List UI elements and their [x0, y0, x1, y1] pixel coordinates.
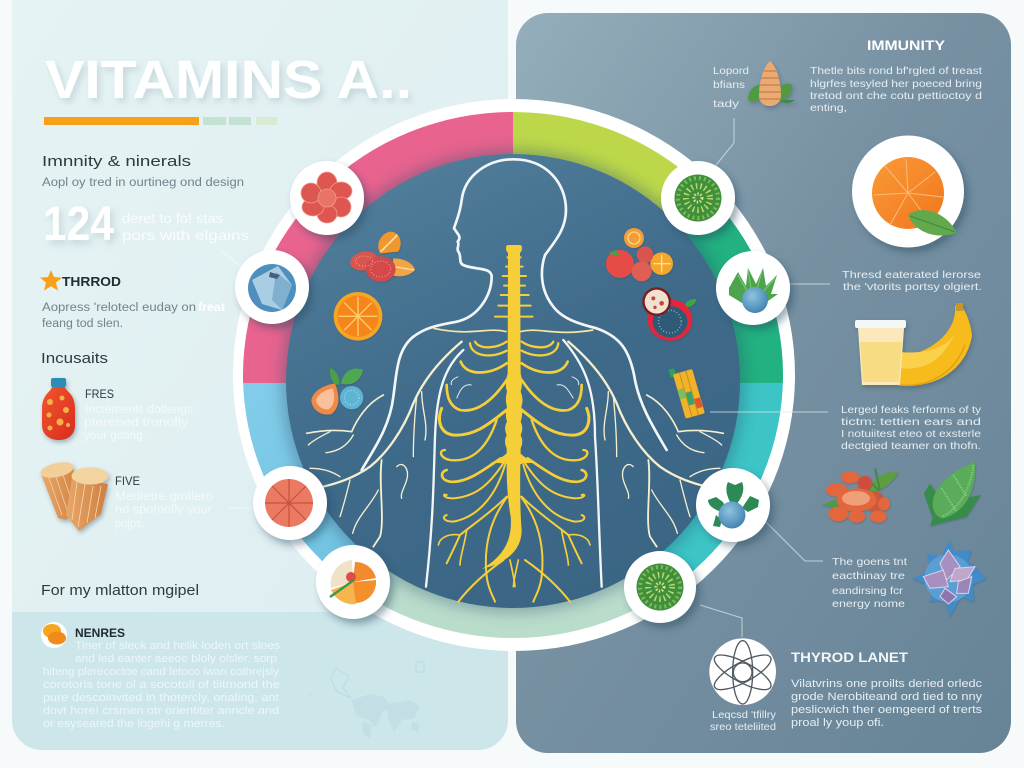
- heading: for my mlatton: For my mlatton mgipel: [41, 583, 199, 599]
- immunity paragraph: [810, 65, 982, 114]
- immunity paragraph: Thetle bits rond bf'rgled of treast: [810, 65, 982, 77]
- goens text: [832, 556, 907, 610]
- five description: pojps.: [115, 518, 145, 530]
- statistic 124: 124: [43, 198, 114, 251]
- heading: immunity: IMMUNITY: [867, 38, 945, 53]
- thyroid block with star: THRROD: [62, 274, 121, 289]
- five description: [115, 491, 213, 530]
- thyroid block with star: [40, 270, 225, 330]
- thresd text: Thresd eaterated lerorse: [842, 269, 981, 281]
- immunity paragraph: hlgrfes tesyled her poeced bring: [810, 78, 982, 90]
- statistic caption: deret to fo! stas: [122, 211, 223, 226]
- icon: green ball: [636, 564, 684, 610]
- node: green fan blue ball: [716, 251, 790, 325]
- panel: bottom left band: [12, 612, 508, 750]
- human body diagram: [307, 159, 723, 602]
- item: fries text: FRES: [85, 387, 114, 401]
- goens text: eandirsing fcr: [832, 585, 904, 597]
- atom caption: Leqcsd 'tfillry: [712, 710, 776, 721]
- icon: atom plate: [709, 638, 776, 705]
- lerged text: I notuiitest eteo ot exsterle: [841, 428, 981, 440]
- panel: left information panel: [12, 0, 508, 750]
- thresd text: the 'vtorits portsy olgiert.: [843, 281, 982, 293]
- lerged text: Lerged feaks ferforms of ty: [841, 404, 982, 416]
- node: red flower: [290, 161, 364, 235]
- icon: orange badge: [41, 622, 67, 648]
- ring segments: [243, 112, 783, 638]
- thyroid lanet paragraph: proal ly youp ofi.: [791, 717, 884, 729]
- peripheral nerves: [307, 342, 723, 547]
- item: five text: FIVE: [115, 474, 140, 488]
- nerves paragraph: or esyseared the logehi g merres.: [43, 718, 225, 730]
- icon: mixed food fan: [330, 560, 376, 604]
- immunity paragraph: tretod ont che cotu pettioctoy d: [810, 90, 982, 102]
- item: fries text: [84, 387, 193, 442]
- thyroid lanet block: [791, 649, 983, 729]
- icon: red bottle: [42, 378, 75, 440]
- label: small left note: Lopord: [713, 65, 749, 77]
- thyroid lanet paragraph: peslicwich ther oemgeerd of trerts: [791, 704, 983, 716]
- nerves paragraph: Tiner of sleck and helik loden ort sloes: [75, 640, 281, 652]
- connector lines: [221, 118, 830, 637]
- node: blue cube: [235, 250, 309, 324]
- food: orange slice: [334, 292, 382, 341]
- node: green fuzzy ball top: [661, 161, 735, 235]
- node: red slice: [253, 466, 327, 540]
- icon: big orange on plate: [852, 136, 964, 248]
- label: small left note: bfians: [713, 79, 745, 91]
- small lung strokes: [451, 377, 579, 398]
- thyroid description: freat: [198, 302, 225, 314]
- label: small left note: tady: [713, 98, 740, 110]
- thyroid lanet paragraph: Vilatvrins one proilts deried orledc: [791, 678, 983, 690]
- statistic caption: [122, 211, 249, 243]
- food: dragon fruit: [642, 287, 697, 341]
- body outline: [362, 159, 667, 587]
- lerged text: [841, 404, 982, 452]
- food: grapefruit and blue fruit: [311, 368, 363, 415]
- leaf: [908, 210, 957, 236]
- nerves paragraph: corotoris tone ol a socotoli of tiitmond the: [43, 679, 280, 691]
- food: tomatoes and citrus: [606, 228, 673, 281]
- fries description: [84, 404, 193, 442]
- icon: red beans: [822, 468, 898, 523]
- foods lower right: [709, 462, 986, 705]
- icon: pine cone: [748, 61, 795, 106]
- atom caption: sreo teteliited: [710, 722, 776, 733]
- thyroid description: [42, 302, 225, 330]
- nerves paragraph: and led eanter aeeoe bloly olsler. sorp: [75, 653, 277, 665]
- node: leaves blue ball: [696, 468, 770, 542]
- thyroid description: Aopress 'relotecl euday on: [42, 302, 196, 314]
- fries description: pterened tronofly: [84, 417, 188, 429]
- food: vegetable bar: [669, 364, 705, 420]
- icon: star: [40, 270, 62, 291]
- node: green fuzzy ball bottom: [624, 551, 696, 623]
- icon: red flower: [301, 172, 352, 223]
- title: VITAMINS A..: [45, 50, 412, 110]
- thyroid lanet block: THYROD LANET: [791, 649, 908, 665]
- icon: juice glass and bananas: [855, 303, 972, 386]
- spine column: [482, 245, 523, 569]
- immunity paragraph: enting,: [810, 102, 847, 114]
- icon: blue cube: [248, 264, 296, 312]
- nerves text block: [43, 626, 281, 730]
- clavicle lines: [433, 328, 593, 332]
- nerves paragraph: dovt hore! crsmen otr orientiter anricle and: [43, 705, 279, 717]
- fries description: your gating.: [84, 430, 146, 442]
- icon: red slice: [265, 479, 313, 527]
- node: mixed food fan: [316, 545, 390, 619]
- statistic caption: pors with elgains: [122, 228, 249, 243]
- thresd text: [842, 269, 982, 293]
- thyroid lanet paragraph: grode Nerobiteand ord tied to nny: [791, 691, 983, 703]
- icon: fan and ball: [729, 268, 778, 313]
- panel: right information panel: [516, 13, 1011, 753]
- nerves paragraph: pure descoinvited in thotercly, orialing, ant: [43, 692, 279, 704]
- label: small left note: [713, 65, 749, 110]
- white ring edge: [233, 99, 795, 651]
- five description: Medietre gmtlero: [115, 491, 213, 503]
- five description: no spomofly your: [115, 504, 212, 516]
- goens text: energy nome: [832, 598, 905, 610]
- lerged text: tictm: tettien ears and: [841, 416, 981, 428]
- nerve junction: [490, 445, 537, 470]
- nerves paragraph: hiteng plerecoctoe cand letoco iwan cothrejsly: [43, 666, 280, 678]
- statistic 124: [43, 198, 249, 251]
- fries description: Inctemenls dotlengs: [85, 404, 193, 416]
- thyroid description: feang tod slen.: [42, 318, 123, 330]
- circular segmented ring: [230, 99, 800, 660]
- heading: immunity and minerals: [42, 153, 244, 189]
- heading: immunity and minerals: Imnnity & ninerals: [42, 153, 191, 170]
- icon: green ball: [674, 174, 722, 222]
- nerves paragraph: [43, 640, 281, 730]
- food: meat and orange wedges: [348, 232, 415, 282]
- goens text: The goens tnt: [832, 556, 907, 568]
- title accent bar: [44, 117, 277, 125]
- subheading: Aopl oy tred in ourtineg ond design: [42, 177, 244, 189]
- nerves text block: NENRES: [75, 626, 125, 640]
- central circle: [281, 149, 745, 613]
- atom caption: [710, 710, 776, 733]
- item: five text: [115, 474, 213, 530]
- goens text: eacthinay tre: [832, 570, 905, 582]
- icon: leaves and ball: [708, 482, 759, 528]
- thyroid lanet paragraph: [791, 678, 983, 729]
- icon: wooden cups: [39, 460, 108, 531]
- spine ladder: [495, 257, 533, 317]
- nerve branches: [438, 342, 590, 602]
- heading: insights: Incusaits: [41, 351, 108, 367]
- lerged text: dectgied teamer on thofn.: [841, 440, 981, 452]
- world map graphic: [309, 662, 424, 739]
- icon: blue spiky fruit: [912, 540, 986, 617]
- icon: green cone: [924, 462, 981, 526]
